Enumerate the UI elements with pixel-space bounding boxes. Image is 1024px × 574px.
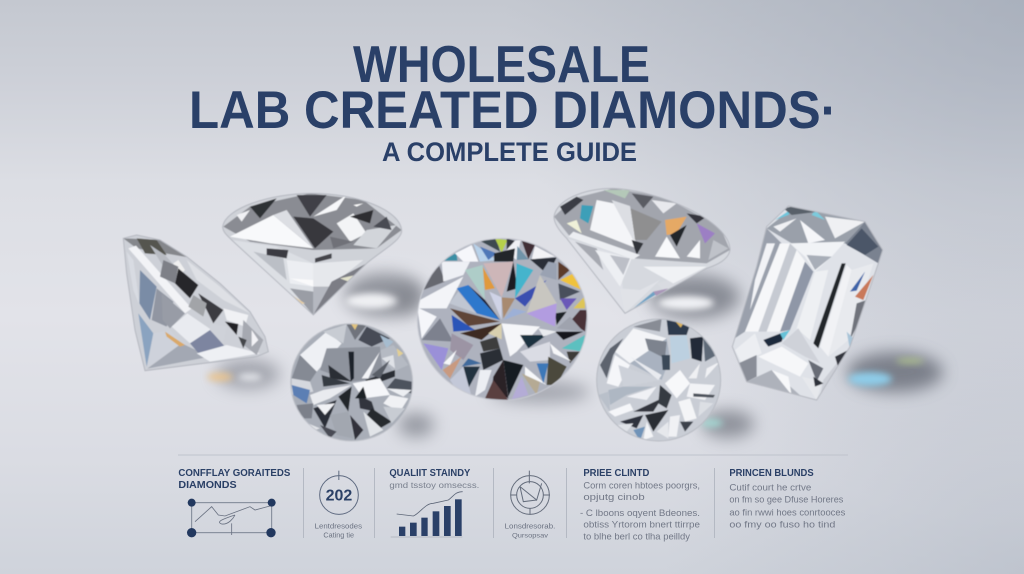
panel: princen blunds — [729, 468, 846, 529]
panel body: obtiss Yrtorom bnert ttirrpe — [583, 519, 700, 529]
panel body — [729, 483, 846, 529]
panel body — [580, 481, 700, 541]
panel subheading: gmd tsstoy omsecss. — [389, 480, 479, 490]
panel: emblem — [505, 471, 555, 539]
panel: pref clintd — [580, 468, 700, 541]
title: A COMPLETE GUIDE — [382, 137, 637, 167]
panel body: opjutg cinob — [583, 492, 645, 502]
panel heading: PRIEE CLINTD — [583, 468, 649, 479]
diamond: rear left upturned round — [220, 190, 403, 317]
panel heading: CONFFLAY GORAITEDS — [178, 468, 290, 479]
panel heading: PRINCEN BLUNDS — [729, 468, 814, 479]
diamond: large central round with colour fire — [417, 237, 588, 402]
emblem caption: Lonsdresorab. — [505, 522, 555, 531]
panel body: ao fin rwwi hoes conrtooces — [729, 508, 846, 518]
emblem caption line two: Qursopsav — [512, 532, 549, 539]
divider line — [178, 454, 848, 456]
badge caption: Lentdresodes — [315, 522, 362, 531]
panel heading: QUALIIT STAINDY — [389, 468, 470, 479]
panel: confflay goraiteds diamonds — [178, 468, 290, 537]
panel divider — [303, 468, 304, 538]
panel divider — [374, 468, 375, 538]
panel body: Cutif court he crtve — [729, 483, 811, 493]
badge caption — [315, 522, 362, 539]
title: LAB CREATED DIAMONDS· — [189, 81, 837, 140]
panel heading — [178, 468, 290, 491]
panel: date badge — [315, 471, 362, 539]
bar chart — [391, 492, 463, 537]
diamond: left side-on round brilliant — [120, 233, 270, 373]
network diagram — [187, 499, 276, 537]
diamond shadows — [207, 273, 943, 438]
badge caption: Cating tie — [323, 530, 354, 539]
icon: compass emblem — [511, 471, 550, 514]
panel divider — [493, 468, 494, 538]
diamond: small round right — [595, 317, 723, 443]
circle badge 202: 202 — [326, 488, 352, 505]
diamond: emerald cut — [730, 203, 885, 403]
panel divider — [714, 468, 715, 538]
diamond: small round left — [290, 322, 413, 442]
title: WHOLESALE — [353, 36, 650, 94]
panel body: to blhe berl co tlha peilldy — [583, 531, 691, 541]
diamond: rear right upturned round — [553, 187, 732, 315]
panel body: Corm coren hbtoes poorgrs, — [583, 481, 700, 491]
panel body: on fm so gee Dfuse Horeres — [729, 494, 844, 504]
panel divider — [566, 468, 567, 538]
panel: quality chart — [389, 468, 479, 537]
title — [189, 36, 837, 167]
panel heading: DIAMONDS — [178, 480, 237, 491]
panel body: oo fmy oo fuso ho tind — [729, 519, 835, 529]
panel body: - C lboons oqyent Bdeones. — [580, 508, 700, 518]
